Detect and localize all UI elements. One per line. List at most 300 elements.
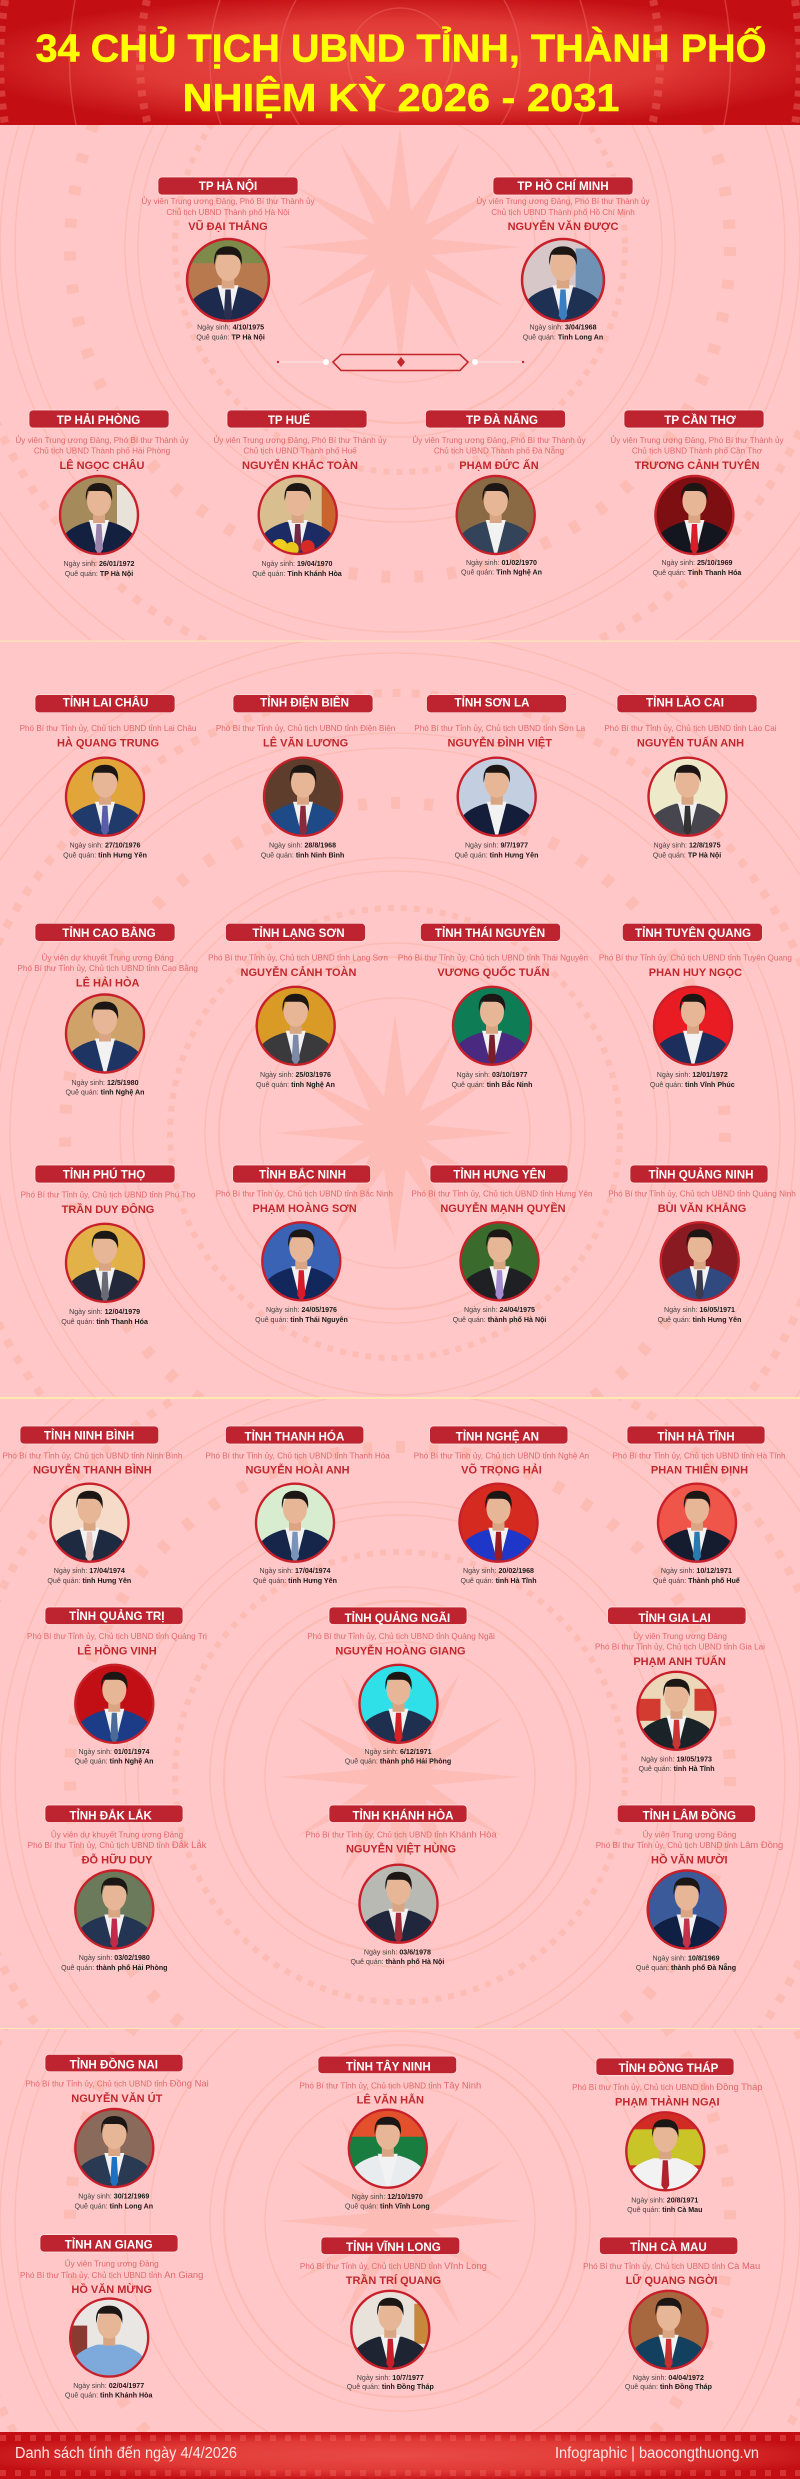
role: Phó Bí thư Tỉnh ủy, Chủ tịch UBND tỉnh Cao Bằng (18, 963, 198, 973)
birth and hometown: Ngày sinh: 20/02/1968 (463, 1567, 534, 1575)
heading pill (426, 695, 566, 713)
divider ornament (277, 354, 524, 370)
heading pill: TỈNH HƯNG YÊN (453, 1168, 546, 1181)
heading pill: TỈNH ĐỒNG NAI (70, 2058, 158, 2072)
role: Phó Bí thư Tỉnh ủy, Chủ tịch UBND tỉnh Thái Nguyên (398, 953, 588, 962)
birth and hometown (347, 2374, 435, 2391)
birth and hometown (66, 1079, 144, 1096)
birth and hometown (461, 559, 542, 576)
birth and hometown (47, 1567, 131, 1585)
portrait (65, 1223, 145, 1303)
role (476, 195, 651, 217)
panel: TP Cần Thơ (610, 410, 785, 577)
birth and hometown (625, 2374, 713, 2391)
heading pill (29, 410, 169, 428)
portrait (261, 1221, 341, 1301)
heading pill (233, 1165, 371, 1183)
name: VÕ TRỌNG HẢI (461, 1464, 542, 1477)
name: LÊ HỒNG VINH (77, 1644, 157, 1657)
panel: Tỉnh Đắk Lắk (28, 1805, 207, 1972)
birth and hometown: Ngày sinh: 12/10/1970 (352, 2193, 423, 2201)
portrait (350, 2290, 430, 2370)
birth and hometown: Quê quán: thành phố Hải Phòng (61, 1964, 168, 1972)
heading pill: TỈNH THÁI NGUYÊN (435, 927, 545, 940)
heading pill: TP HUẾ (268, 414, 310, 427)
birth and hometown: Ngày sinh: 24/05/1976 (266, 1306, 337, 1314)
heading pill (617, 1805, 756, 1822)
role: Phó Bí thư Tỉnh ủy, Chủ tịch UBND tỉnh Bắc Ninh (216, 1189, 393, 1199)
birth and hometown: Quê quán: tỉnh Nghệ An (75, 1758, 153, 1766)
birth and hometown (460, 1567, 537, 1585)
birth and hometown (63, 842, 147, 860)
heading pill: TỈNH LÂM ĐỒNG (643, 1809, 736, 1822)
role (596, 1828, 783, 1850)
heading pill (318, 2056, 457, 2074)
header banner (0, 0, 800, 125)
heading pill (45, 1805, 183, 1822)
name: VƯƠNG QUỐC TUẤN (437, 965, 549, 979)
portrait (647, 1870, 727, 1950)
heading pill: TP ĐÀ NẴNG (466, 414, 538, 427)
role: Phó Bí thư Tỉnh ủy, Chủ tịch UBND tỉnh Thanh Hóa (206, 1451, 390, 1460)
name: NGUYỄN VIỆT HÙNG (346, 1842, 456, 1855)
panel: TP Hồ Chí Minh (476, 177, 651, 342)
heading pill: TP CẦN THƠ (664, 414, 736, 427)
birth and hometown: Quê quán: tỉnh Đồng Tháp (347, 2382, 435, 2391)
panel: TP Hà Nội (141, 177, 316, 342)
panel: Tỉnh Gia Lai (595, 1607, 765, 1773)
portrait (69, 2298, 149, 2378)
role: Phó Bí thư Tỉnh ủy, Chủ tịch UBND tỉnh Quảng Ngãi (307, 1632, 495, 1641)
name: NGUYỄN VĂN ÚT (71, 2092, 163, 2105)
heading pill (158, 177, 298, 195)
name: PHẠM THÀNH NGẠI (615, 2095, 720, 2108)
heading pill: TỈNH KHÁNH HÒA (352, 1809, 454, 1822)
background pattern: bronze drum section 4 (0, 2029, 800, 2432)
birth and hometown (255, 1306, 348, 1324)
panel: TP Đà Nẵng (412, 410, 587, 576)
role: Phó Bí thư Tỉnh ủy, Chủ tịch UBND tỉnh Đồng Nai (25, 2078, 209, 2088)
heading pill (627, 1426, 765, 1444)
portrait (653, 986, 733, 1066)
heading pill (622, 923, 762, 941)
birth and hometown: Ngày sinh: 4/10/1975 (197, 324, 264, 332)
role: Phó Bí thư Tỉnh ủy, Chủ tịch UBND tỉnh Cà Mau (583, 2260, 760, 2271)
birth and hometown: Ngày sinh: 17/04/1974 (259, 1567, 331, 1575)
heading pill (40, 2235, 178, 2252)
heading pill: TỈNH TUYÊN QUANG (635, 927, 751, 940)
birth and hometown (653, 842, 721, 860)
background pattern: bronze drum section 2 (0, 642, 800, 1397)
birth and hometown (638, 1756, 715, 1773)
name: BÙI VĂN KHẮNG (658, 1202, 746, 1215)
heading pill (45, 1607, 183, 1624)
panel: Tỉnh Quảng Trị (27, 1607, 207, 1766)
role: Phó Bí thư Tỉnh ủy, Chủ tịch UBND tỉnh Phú Thọ (21, 1191, 196, 1200)
portrait (636, 1671, 716, 1751)
birth and hometown (455, 842, 538, 860)
heading pill (35, 695, 175, 713)
portrait (65, 757, 145, 837)
birth and hometown: Quê quán: tỉnh Đồng Tháp (625, 2382, 713, 2391)
role: Phó Bí thư Tỉnh ủy, Chủ tịch UBND tỉnh Hưng Yên (411, 1190, 593, 1199)
birth and hometown (196, 324, 265, 342)
role: Phó Bí thư Tỉnh ủy, Chủ tịch UBND tỉnh Sơn La (414, 724, 586, 733)
birth and hometown (345, 1748, 451, 1766)
heading pill: TỈNH PHÚ THỌ (63, 1168, 145, 1181)
role (213, 434, 388, 456)
portrait (255, 1483, 335, 1563)
portrait (629, 2290, 709, 2370)
heading pill (430, 1165, 568, 1183)
name: TRƯƠNG CẢNH TUYÊN (635, 459, 759, 472)
role (15, 434, 190, 456)
role: Ủy viên Trung ương Đảng, Phó Bí thư Thành ủy (213, 434, 388, 445)
name: NGUYỄN KHẮC TOÀN (242, 459, 358, 472)
role: Phó Bí thư Tỉnh ủy, Chủ tịch UBND tỉnh Quảng Ninh (608, 1190, 796, 1199)
panel: Tỉnh Khánh Hòa (305, 1805, 497, 1966)
heading pill (226, 923, 366, 941)
birth and hometown (63, 560, 135, 578)
role (595, 1630, 765, 1651)
birth and hometown: Ngày sinh: 03/10/1977 (456, 1071, 528, 1079)
birth and hometown (650, 1071, 735, 1089)
birth and hometown (345, 2193, 430, 2210)
portrait (358, 1664, 438, 1744)
birth and hometown (261, 842, 344, 860)
birth and hometown (256, 1071, 335, 1089)
birth and hometown (636, 1954, 736, 1972)
role (141, 195, 316, 217)
panel: Tỉnh Đồng Tháp (572, 2058, 763, 2214)
panel: Tỉnh Hưng Yên (411, 1165, 593, 1324)
birth and hometown (452, 1071, 532, 1089)
role: Ủy viên Trung ương Đảng (633, 1630, 727, 1641)
birth and hometown (253, 1567, 337, 1585)
birth and hometown: Quê quán: tỉnh Nghệ An (256, 1081, 335, 1089)
birth and hometown: Ngày sinh: 12/5/1980 (71, 1079, 139, 1087)
birth and hometown: Quê quán: thành phố Đà Nẵng (636, 1963, 736, 1972)
portrait (660, 1221, 740, 1301)
role: Ủy viên dự khuyết Trung ương Đảng (51, 1828, 183, 1839)
portrait (256, 986, 336, 1066)
role: Ủy viên dự khuyết Trung ương Đảng (42, 951, 174, 962)
portrait (74, 1870, 154, 1950)
birth and hometown: Quê quán: tỉnh Ninh Bình (261, 852, 344, 860)
birth and hometown (61, 1954, 168, 1972)
birth and hometown: Quê quán: tỉnh Hà Tĩnh (638, 1765, 715, 1773)
role (610, 434, 785, 456)
heading pill (329, 1607, 467, 1625)
heading pill: TỈNH CÀ MAU (630, 2241, 707, 2254)
birth and hometown: Ngày sinh: 20/8/1971 (631, 2196, 698, 2204)
birth and hometown: Ngày sinh: 10/7/1977 (357, 2374, 424, 2382)
birth and hometown (61, 1308, 148, 1326)
birth and hometown: Ngày sinh: 03/02/1980 (79, 1954, 150, 1962)
birth and hometown: Ngày sinh: 25/10/1969 (661, 559, 733, 567)
name: NGUYỄN THANH BÌNH (33, 1464, 152, 1477)
role (18, 951, 198, 973)
birth and hometown: Ngày sinh: 6/12/1971 (364, 1748, 432, 1756)
heading pill: TỈNH LÀO CAI (646, 697, 724, 710)
birth and hometown: Quê quán: thành phố Hải Phòng (345, 1758, 451, 1766)
birth and hometown (627, 2196, 702, 2214)
portrait (460, 1221, 540, 1301)
panel: Tỉnh Lai Châu (20, 695, 196, 860)
role: Ủy viên Trung ương Đảng (65, 2258, 159, 2269)
role: Phó Bí thư Tỉnh ủy, Chủ tịch UBND tỉnh Hà Tĩnh (613, 1451, 785, 1460)
heading pill: TỈNH HÀ TĨNH (657, 1430, 735, 1443)
portrait (648, 757, 728, 837)
birth and hometown (65, 2382, 153, 2400)
panel: Tỉnh Thái Nguyên (398, 923, 588, 1089)
role: Phó Bí thư Tỉnh ủy, Chủ tịch UBND tỉnh Quảng Trị (27, 1632, 207, 1641)
role (28, 1828, 207, 1850)
role: Phó Bí thư Tỉnh ủy, Chủ tịch UBND tỉnh Lạng Sơn (208, 953, 388, 962)
heading pill: TỈNH BẮC NINH (259, 1168, 346, 1181)
birth and hometown: Quê quán: tỉnh Vĩnh Long (345, 2202, 430, 2210)
footer bar (0, 2432, 800, 2479)
heading pill (35, 923, 175, 941)
heading pill: TỈNH AN GIANG (65, 2238, 153, 2251)
heading pill: TỈNH THANH HÓA (244, 1430, 345, 1443)
heading pill (630, 1165, 768, 1183)
role: Chủ tịch UBND Thành phố Đà Nẵng (434, 446, 564, 456)
footer note: Danh sách tính đến ngày 4/4/2026 (15, 2445, 237, 2462)
heading pill (321, 2237, 460, 2254)
background pattern: bronze drum section 3 (0, 1399, 800, 2028)
birth and hometown: Ngày sinh: 03/6/1978 (364, 1948, 431, 1956)
portrait (457, 757, 537, 837)
role: Chủ tịch UBND Thành phố Huế (243, 447, 357, 456)
role: Chủ tịch UBND Thành phố Hà Nội (166, 208, 290, 217)
heading pill (226, 1426, 364, 1444)
portrait (625, 2111, 705, 2191)
birth and hometown: Ngày sinh: 10/8/1969 (652, 1954, 720, 1962)
heading pill: TP HÀ NỘI (199, 180, 257, 193)
birth and hometown: Ngày sinh: 12/01/1972 (657, 1071, 728, 1079)
role (412, 434, 587, 456)
role: Phó Bí thư Tỉnh ủy, Chủ tịch UBND tỉnh Lào Cai (604, 724, 777, 733)
heading pill: TP HỒ CHÍ MINH (517, 180, 609, 193)
role: Ủy viên Trung ương Đảng, Phó Bí thư Thành ủy (412, 434, 587, 445)
role: Ủy viên Trung ương Đảng (643, 1828, 736, 1839)
portrait (657, 1483, 737, 1563)
role: Ủy viên Trung ương Đảng, Phó Bí thư Thành ủy (476, 195, 651, 206)
birth and hometown: Ngày sinh: 02/04/1977 (73, 2382, 144, 2390)
portrait (654, 475, 734, 555)
heading pill (624, 410, 764, 428)
role: Chủ tịch UBND Thành phố Hải Phòng (34, 447, 170, 456)
panel: Tỉnh An Giang (20, 2235, 203, 2400)
birth and hometown: Ngày sinh: 9/7/1977 (465, 842, 528, 850)
portrait (263, 757, 343, 837)
heading pill (600, 2237, 738, 2254)
birth and hometown: Ngày sinh: 12/04/1979 (69, 1308, 140, 1316)
panel: Tỉnh Hà Tĩnh (613, 1426, 785, 1585)
birth and hometown: Ngày sinh: 24/04/1975 (464, 1306, 535, 1314)
panel: TP Huế (213, 410, 388, 578)
panel: Tỉnh Lâm Đồng (596, 1805, 783, 1972)
birth and hometown: Quê quán: TP Hà Nội (196, 334, 265, 342)
birth and hometown: Quê quán: thành phố Hà Nội (453, 1316, 546, 1324)
role (20, 2258, 203, 2280)
panel: Tỉnh Lào Cai (604, 695, 777, 860)
heading pill: TỈNH CAO BẰNG (62, 927, 156, 940)
name: PHAN THIÊN ĐỊNH (651, 1464, 748, 1477)
heading pill (227, 410, 367, 428)
heading pill: TỈNH NINH BÌNH (44, 1429, 134, 1442)
birth and hometown: Quê quán: tỉnh Hưng Yên (63, 852, 147, 860)
portrait (456, 475, 536, 555)
heading pill (233, 695, 373, 713)
birth and hometown: Ngày sinh: 04/04/1972 (633, 2374, 704, 2382)
name: PHẠM ANH TUẤN (633, 1655, 726, 1668)
panel: Tỉnh Lạng Sơn (208, 923, 388, 1089)
name: PHAN HUY NGỌC (649, 967, 742, 979)
portrait (65, 994, 145, 1074)
birth and hometown (523, 324, 603, 342)
birth and hometown: Ngày sinh: 12/8/1975 (653, 842, 721, 850)
role: Phó Bí thư Tỉnh ủy, Chủ tịch UBND tỉnh An Giang (20, 2269, 203, 2280)
role: Phó Bí thư Tỉnh ủy, Chủ tịch UBND tỉnh Tây Ninh (299, 2079, 481, 2090)
portrait (50, 1483, 130, 1563)
birth and hometown (653, 559, 741, 577)
birth and hometown (252, 560, 342, 578)
background pattern: bronze drum section 1 (0, 125, 800, 640)
name: LÊ NGỌC CHÂU (60, 459, 145, 472)
footer credit: Infographic | baocongthuong.vn (555, 2445, 759, 2462)
heading pill: TỈNH ĐỒNG THÁP (618, 2062, 719, 2075)
name: NGUYỄN CẢNH TOÀN (241, 966, 357, 979)
birth and hometown: Quê quán: tỉnh Hưng Yên (47, 1577, 131, 1585)
panel: TP Hải Phòng (15, 410, 190, 578)
birth and hometown: Quê quán: tỉnh Hưng Yên (455, 852, 538, 860)
heading pill: TỈNH LẠNG SƠN (252, 927, 345, 940)
role: Phó Bí thư Tỉnh ủy, Chủ tịch UBND tỉnh Điện Biên (216, 724, 395, 733)
portrait (521, 238, 605, 322)
birth and hometown: Quê quán: Tỉnh Thanh Hóa (653, 569, 741, 577)
panel: Tỉnh Đồng Nai (25, 2054, 209, 2210)
birth and hometown: Quê quán: tỉnh Hưng Yên (253, 1577, 337, 1585)
birth and hometown: Ngày sinh: 30/12/1969 (78, 2192, 149, 2200)
birth and hometown: Quê quán: tỉnh Cà Mau (627, 2206, 702, 2214)
panel: Tỉnh Điện Biên (216, 695, 395, 860)
name: PHẠM HOÀNG SƠN (253, 1202, 357, 1215)
birth and hometown: Quê quán: Tỉnh Khánh Hòa (252, 570, 342, 578)
name: LÊ VĂN HẪN (357, 2093, 424, 2106)
panel: Tỉnh Tuyên Quang (599, 923, 792, 1089)
birth and hometown: Quê quán: thành phố Hà Nội (350, 1958, 444, 1966)
name: PHẠM ĐỨC ẤN (459, 459, 539, 472)
birth and hometown: Quê quán: tỉnh Vĩnh Phúc (650, 1081, 735, 1089)
birth and hometown: Ngày sinh: 17/04/1974 (54, 1567, 125, 1575)
heading pill: TỈNH ĐIỆN BIÊN (260, 697, 349, 710)
panel: Tỉnh Thanh Hóa (206, 1426, 390, 1585)
heading pill: TỈNH QUẢNG NINH (649, 1168, 753, 1181)
heading pill (20, 1426, 159, 1444)
heading pill (608, 1607, 746, 1625)
role: Chủ tịch UBND Thành phố Hồ Chí Minh (491, 208, 635, 217)
birth and hometown: Ngày sinh: 16/05/1971 (664, 1306, 735, 1314)
title: 34 CHỦ TỊCH UBND TỈNH, THÀNH PHỐ (36, 26, 766, 70)
name: NGUYỄN HOÀI ANH (245, 1464, 350, 1477)
birth and hometown (75, 2192, 153, 2210)
name: TRẦN DUY ĐÔNG (62, 1203, 154, 1216)
heading pill (430, 1426, 568, 1444)
name: VŨ ĐẠI THẮNG (188, 220, 268, 233)
heading pill (596, 2058, 734, 2075)
name: NGUYỄN HOÀNG GIANG (335, 1644, 466, 1657)
panel: Tỉnh Ninh Bình (2, 1426, 182, 1585)
name: TRẦN TRÍ QUANG (346, 2274, 441, 2287)
birth and hometown: Quê quán: Tỉnh Long An (523, 334, 603, 342)
birth and hometown: Quê quán: Tỉnh Nghệ An (461, 568, 542, 576)
heading pill (420, 923, 560, 941)
role: Ủy viên Trung ương Đảng, Phó Bí thư Thành ủy (610, 434, 785, 445)
birth and hometown (453, 1306, 546, 1324)
name: LÊ VĂN LƯƠNG (263, 737, 348, 750)
name: LÊ HẢI HÒA (76, 976, 140, 989)
name: HỒ VĂN MƯỜI (651, 1853, 728, 1866)
portrait (74, 1664, 154, 1744)
birth and hometown: Quê quán: tỉnh Thanh Hóa (61, 1318, 148, 1326)
name: ĐỖ HỮU DUY (82, 1853, 153, 1866)
heading pill (617, 695, 757, 713)
role: Phó Bí thư Tỉnh ủy, Chủ tịch UBND tỉnh Khánh Hòa (305, 1828, 497, 1839)
role: Phó Bí thư Tỉnh ủy, Chủ tịch UBND tỉnh Gia Lai (595, 1642, 765, 1651)
panel: Tỉnh Tây Ninh (299, 2056, 481, 2210)
name: NGUYỄN MẠNH QUYỀN (440, 1202, 566, 1215)
role: Chủ tịch UBND Thành phố Cần Thơ (632, 447, 763, 456)
panel: Tỉnh Bắc Ninh (216, 1165, 393, 1324)
birth and hometown: Ngày sinh: 26/01/1972 (63, 560, 135, 568)
name: NGUYỄN TUẤN ANH (637, 737, 744, 750)
birth and hometown: Quê quán: tỉnh Nghệ An (66, 1088, 144, 1096)
panel: Tỉnh Quảng Ngãi (307, 1607, 495, 1766)
panel: Tỉnh Sơn La (414, 695, 586, 860)
heading pill: TỈNH NGHỆ AN (456, 1430, 539, 1443)
role: Ủy viên Trung ương Đảng, Phó Bí thư Thành ủy (141, 195, 316, 206)
title: NHIỆM KỲ 2026 - 2031 (182, 76, 620, 120)
heading pill: TỈNH GIA LAI (638, 1612, 711, 1625)
panel: Tỉnh Cao Bằng (18, 923, 198, 1096)
birth and hometown (350, 1948, 444, 1966)
title (36, 26, 766, 120)
role: Phó Bí thư Tỉnh ủy, Chủ tịch UBND tỉnh Lai Châu (20, 724, 196, 733)
heading pill (493, 177, 633, 195)
role: Ủy viên Trung ương Đảng, Phó Bí thư Thành ủy (15, 434, 190, 445)
birth and hometown: Ngày sinh: 19/05/1973 (641, 1756, 712, 1764)
panel: Tỉnh Vĩnh Long (300, 2237, 487, 2391)
portrait (186, 238, 270, 322)
heading pill (329, 1805, 467, 1822)
birth and hometown: Quê quán: tỉnh Khánh Hòa (65, 2392, 153, 2400)
heading pill: TP HẢI PHÒNG (57, 414, 140, 427)
birth and hometown: Quê quán: TP Hà Nội (65, 570, 133, 578)
panel: Tỉnh Quảng Ninh (608, 1165, 796, 1324)
role: Phó Bí thư Tỉnh ủy, Chủ tịch UBND tỉnh Ninh Bình (2, 1451, 182, 1460)
heading pill: TỈNH QUẢNG NGÃI (345, 1612, 450, 1625)
heading pill: TỈNH QUẢNG TRỊ (69, 1610, 164, 1623)
birth and hometown: Ngày sinh: 19/04/1970 (261, 560, 333, 568)
name: HÀ QUANG TRUNG (57, 737, 159, 750)
role: Phó Bí thư Tỉnh ủy, Chủ tịch UBND tỉnh Vĩnh Long (300, 2260, 487, 2271)
name: NGUYỄN ĐÌNH VIỆT (447, 737, 552, 750)
heading pill (426, 410, 566, 428)
heading pill (45, 2054, 183, 2072)
birth and hometown: Quê quán: tỉnh Thái Nguyên (255, 1316, 348, 1324)
